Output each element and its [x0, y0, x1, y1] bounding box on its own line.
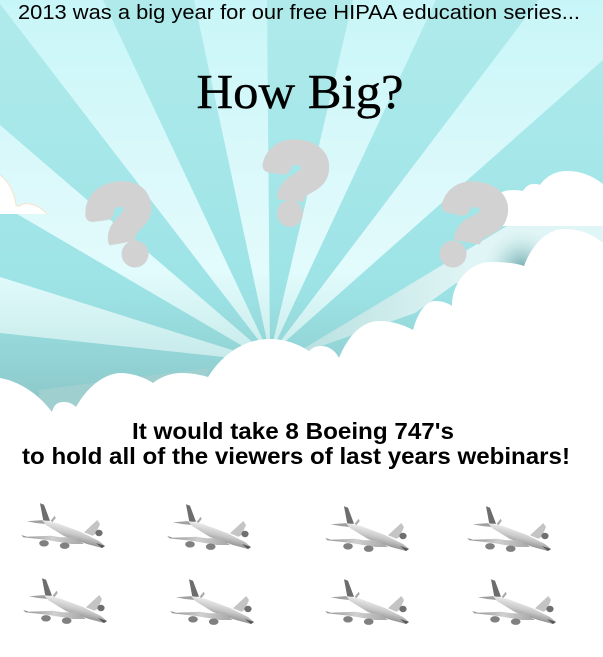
- question mark: left: ?: [80, 163, 163, 289]
- plane 5: [23, 578, 107, 624]
- plane 2: [167, 504, 251, 550]
- plane 6: [170, 579, 254, 625]
- plane 3: [325, 506, 409, 552]
- intro line: 2013 was a big year for our free HIPAA education series...: [18, 2, 580, 24]
- sunburst light rays: [0, 0, 603, 362]
- plane 7: [325, 579, 409, 625]
- cloud: upper right cloud: [480, 171, 603, 226]
- lower left faint ray: [39, 368, 209, 420]
- headline: It would take 8 Boeing 747's: [132, 418, 454, 444]
- plane row 2: [23, 578, 556, 625]
- question mark: left: [85, 181, 152, 268]
- question mark: center: [262, 139, 330, 227]
- plane 1: [21, 503, 105, 549]
- question mark: center: ?: [257, 123, 332, 245]
- lower right light ray: [298, 226, 603, 352]
- headline: to hold all of the viewers of last years webinars!: [22, 443, 570, 469]
- cloud shadow on lower right ray: [440, 226, 603, 320]
- cloud: main cloud bank: [0, 229, 603, 657]
- question mark: right: [440, 181, 508, 268]
- panel: sunburst sky: [0, 0, 603, 420]
- plane row 1: [21, 503, 551, 552]
- cloud: small left cloud: [0, 175, 47, 214]
- question mark: right: ?: [431, 163, 514, 289]
- title: How Big?: [196, 64, 404, 119]
- headline: [22, 418, 570, 469]
- plane 4: [467, 506, 551, 552]
- plane 8: [472, 579, 556, 625]
